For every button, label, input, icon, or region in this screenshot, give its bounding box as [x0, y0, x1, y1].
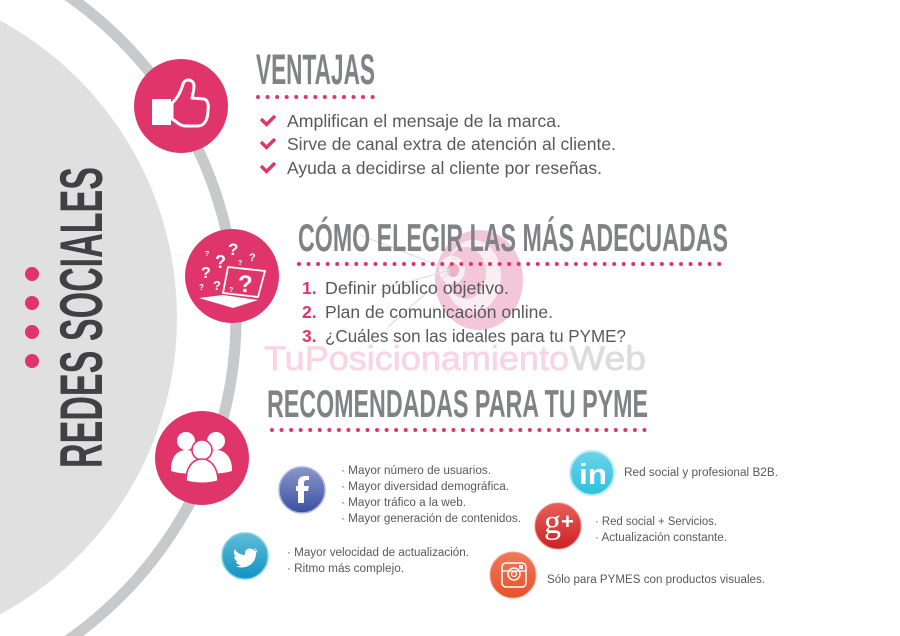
text: google plus — [595, 516, 727, 544]
icon: linkedin: in — [579, 459, 607, 491]
list: ventajas: Ayuda a decidirse al cliente por reseñas. — [287, 158, 602, 178]
list: cómo elegir: 3. — [302, 326, 317, 346]
text: facebook: · Mayor generación de contenidos. — [341, 513, 521, 525]
list: cómo elegir: Plan de comunicación online. — [325, 302, 553, 322]
dotted rule: recomendadas — [272, 428, 648, 432]
gray ring arc — [64, 0, 242, 636]
list: cómo elegir: Definir público objetivo. — [325, 278, 509, 298]
four pink dots — [25, 267, 39, 368]
background gray semicircle — [0, 20, 177, 614]
icon: google plus: + — [561, 509, 574, 534]
text: google plus: · Actualización constante. — [595, 532, 727, 544]
text: facebook: · Mayor diversidad demográfica. — [341, 481, 509, 493]
icon: facebook — [279, 467, 325, 513]
text: google plus: · Red social + Servicios. — [595, 516, 717, 528]
list: ventajas: Amplifican el mensaje de la marca. — [287, 111, 561, 131]
icon: linkedin — [570, 451, 614, 495]
icon: google plus — [535, 503, 581, 549]
list: ventajas — [261, 111, 616, 178]
watermark: target logo — [360, 230, 523, 330]
dotted rule: ventajas — [258, 95, 374, 99]
icon: laptop with question marks: ? — [199, 283, 204, 292]
icon: laptop with question marks: ? — [238, 271, 253, 298]
icon: google plus: g — [544, 504, 561, 541]
icon: laptop with question marks: ? — [215, 252, 226, 272]
text: linkedin: Red social y profesional B2B. — [624, 467, 778, 479]
icon: laptop with question marks: ? — [205, 251, 209, 258]
icon: laptop with question marks: ? — [229, 287, 233, 294]
watermark: TuPosicionamientoWeb: Web — [570, 340, 646, 378]
text: twitter: · Ritmo más complejo. — [287, 563, 404, 575]
list: cómo elegir: 2. — [302, 302, 317, 322]
check marks — [261, 116, 275, 172]
icon: instagram — [490, 552, 536, 598]
icon: laptop with question marks: ? — [249, 252, 256, 264]
icon: laptop with question marks: ? — [201, 265, 211, 282]
icon: laptop with question marks: ? — [238, 260, 242, 267]
watermark: TuPosicionamientoWeb: TuPosicionamiento — [264, 340, 569, 378]
icon: thumbs up — [134, 59, 228, 153]
text: twitter: · Mayor velocidad de actualización. — [287, 547, 469, 559]
icon: laptop with question marks: ? — [228, 240, 238, 259]
text: facebook: · Mayor número de usuarios. — [341, 465, 491, 477]
heading: ventajas: VENTAJAS — [256, 46, 375, 94]
heading: recomendadas: RECOMENDADAS PARA TU PYME — [267, 383, 648, 426]
dotted rule: cómo elegir — [299, 262, 726, 266]
text: facebook: · Mayor tráfico a la web. — [341, 497, 466, 509]
icon: laptop with question marks — [185, 229, 279, 323]
list: cómo elegir: ¿Cuáles son las ideales para tu PYME? — [325, 326, 626, 346]
icon: laptop with question marks: ? — [213, 278, 221, 293]
list: ventajas: Sirve de canal extra de atención al cliente. — [287, 134, 616, 154]
icon: group of people — [155, 411, 249, 505]
list: cómo elegir — [302, 278, 626, 346]
text: facebook — [341, 465, 521, 525]
text: twitter — [287, 547, 469, 575]
icon: twitter — [222, 533, 268, 579]
list: cómo elegir: 1. — [302, 278, 317, 298]
text: instagram: Sólo para PYMES con productos visuales. — [547, 574, 765, 586]
